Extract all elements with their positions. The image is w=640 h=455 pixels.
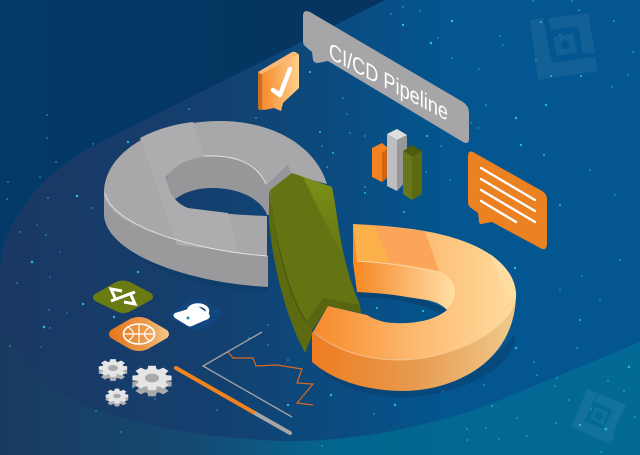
chart axes [203,332,292,417]
banner: CI/CD Pipeline [303,11,469,143]
chart data line [228,352,313,405]
icon: medium gear [99,359,127,381]
background: dark top-left corner [0,0,385,275]
gray edge highlight [105,156,267,256]
orange top surface back [313,224,516,360]
gray bar [387,134,397,191]
icon: check speech bubble [258,52,299,111]
ground shadow of orange ring [312,333,516,397]
green light facet [303,177,345,262]
icon: 3D bar chart [372,129,422,200]
orange ring segment [312,224,516,397]
gray top surface [104,121,327,256]
orange back top panels [353,224,389,262]
green bar [403,151,412,200]
shadow under orange inner wall [357,292,447,314]
icon: lock tile [170,299,222,330]
gray top highlights [140,122,239,252]
green ribbon [269,173,361,353]
line chart [203,332,313,417]
orange outer side wall [312,293,516,391]
orange bar [372,143,388,182]
progress bar [176,368,290,433]
icon: web globe tile [109,317,169,351]
logo watermark: top right [530,13,598,80]
ground shadow of gray ring [105,216,268,293]
icon: small gear [106,389,128,406]
gray outer side wall [104,193,268,287]
logo watermark: bottom right [571,389,626,444]
orange edge highlight [313,295,516,360]
orange inner wall [353,224,462,310]
icon: orange chat bubble [468,152,547,249]
background: lower curved band [0,315,640,455]
icon: large gear [132,366,172,396]
green top [270,173,360,322]
green side [269,190,313,353]
green crease line [272,200,306,322]
gray ring segment [104,121,327,293]
banner label: CI/CD Pipeline [329,38,448,127]
banner shape [303,11,469,143]
gray inner wall [165,155,296,215]
icon: code tile [93,280,153,313]
green fold shadow [307,298,361,331]
